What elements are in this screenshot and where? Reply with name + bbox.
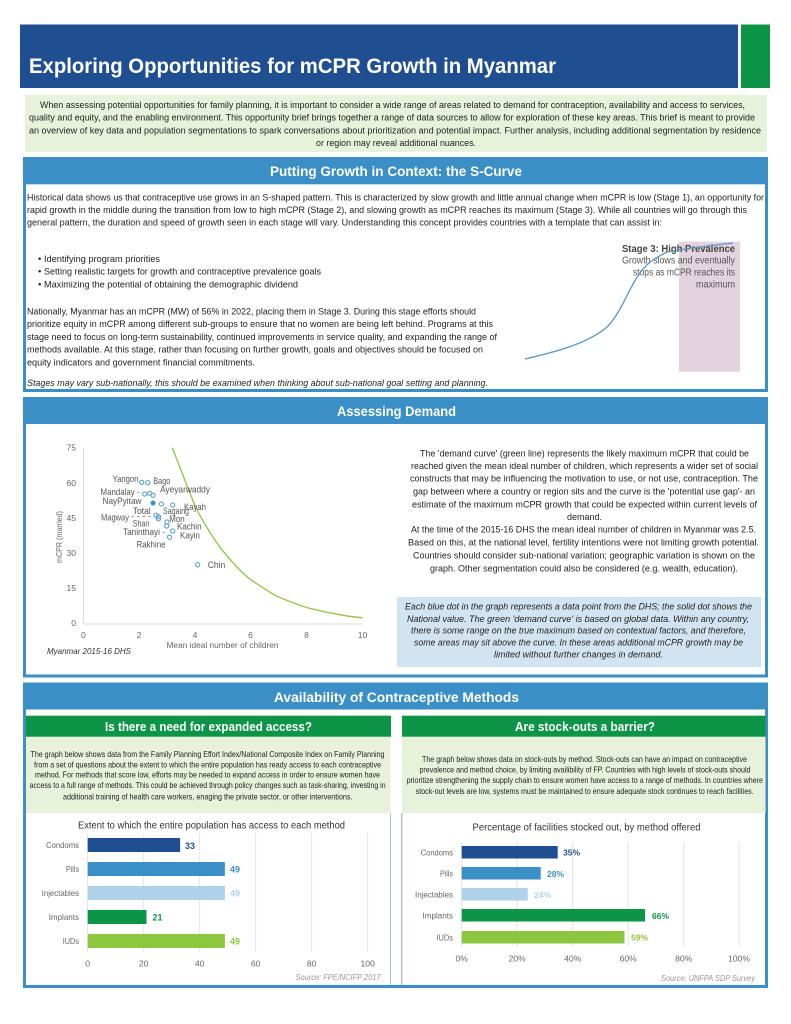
data labels: Mon <box>169 513 185 524</box>
expanded access text: access to a full range of methods. This could be achieved through policy changes such as task-sharing, investing in <box>30 781 386 790</box>
bar chart: access by method: 0 <box>85 958 90 968</box>
bullet list: • <box>38 267 41 278</box>
data labels: Ayeyarwaddy <box>160 484 210 495</box>
scatter chart: 2 <box>137 630 142 640</box>
intro text panel: an overview of key data and population segmentations to spark conversations about prioritization and potential impact. Further analysis, including additional segmentation by residence <box>29 126 761 136</box>
expanded access text: from a set of questions about the extent to which the entire population has ready access to each contraceptive <box>34 760 381 769</box>
demand curve explanation: gap between where a country or region sits and the curve is the 'potential use gap'- an <box>413 487 755 498</box>
demand curve <box>172 448 362 618</box>
expanded access text <box>30 750 386 802</box>
Myanmar stage text: prioritize equity in mCPR among different sub-groups to ensure that no women are being left behind. Programs at this <box>27 319 493 330</box>
bar chart: access by method: Condoms <box>46 840 79 850</box>
panel: assessing demand <box>23 397 768 676</box>
stage 3 label: maximum <box>696 280 735 290</box>
scatter chart: 4 <box>193 630 198 640</box>
Myanmar stage text <box>27 306 497 369</box>
bar chart: access by method: 49 <box>230 936 240 946</box>
scatter chart: 60 <box>66 478 76 488</box>
data labels: Shan <box>133 517 149 528</box>
bar chart: stock-outs by method: Implants <box>422 910 453 920</box>
scatter chart: 10 <box>358 630 367 640</box>
graph note callout: Each blue dot in the graph represents a data point from the DHS; the solid dot shows the <box>405 602 752 613</box>
bar chart: stock-outs by method: 35% <box>563 848 580 858</box>
graph note callout: limited without further changes in demand. <box>494 649 663 660</box>
data labels: Yangon <box>112 473 138 484</box>
scatter chart: Myanmar 2015-16 DHS <box>47 647 132 656</box>
bar chart: stock-outs by method: Pills <box>440 868 453 878</box>
graph note callout <box>397 597 761 667</box>
data labels: Sagaing <box>163 505 189 516</box>
demand curve explanation: Based on this, at the national level, fertility intentions were not limiting growth potential. <box>408 538 759 549</box>
bar chart: stock-outs by method: 100% <box>728 954 750 964</box>
scatter chart: 30 <box>66 548 76 558</box>
Myanmar stage text: equity indicators and government financial commitments. <box>27 358 255 369</box>
heading: assessing demand: Assessing Demand <box>337 404 456 419</box>
demand curve explanation: demand. <box>567 512 602 523</box>
stage 3 label <box>622 244 735 290</box>
bar chart: stock-outs by method: IUDs <box>436 932 453 942</box>
bar chart: stock-outs by method: 20% <box>509 954 526 964</box>
scatter chart: 0 <box>71 618 76 628</box>
expanded access text: additional training of health care workers, enaging the private sector, or other interventions. <box>63 793 352 802</box>
bar chart: access by method <box>42 820 381 982</box>
bar chart: access by method: IUDs <box>63 936 79 946</box>
panel: availability of contraceptive methods <box>23 683 768 986</box>
scatter chart <box>47 442 367 656</box>
S-curve chart <box>525 242 740 372</box>
Myanmar stage text: methods available. At this stage, rather than focusing on further growth, goals and objectives should be focused on <box>27 345 483 356</box>
data labels: Bago <box>153 475 170 486</box>
bar chart: access by method: 80 <box>307 958 317 968</box>
heading: S-curve: Putting Growth in Context: the S-Curve <box>270 164 522 179</box>
scatter chart: 6 <box>248 630 253 640</box>
bar chart: stock-outs by method: 66% <box>652 911 669 921</box>
panel: stock-outs <box>402 716 766 985</box>
demand curve explanation: constructs that may be influencing the motivation to use, or not use, contraception. The <box>410 474 758 485</box>
bar chart: stock-outs by method: Injectables <box>415 890 453 900</box>
bullet list <box>38 254 321 291</box>
bar chart: access by method: Implants <box>49 912 79 922</box>
intro text panel <box>25 95 767 152</box>
scatter chart: 75 <box>66 442 76 452</box>
title: Exploring Opportunities for mCPR Growth in Myanmar <box>29 55 556 78</box>
bar chart: stock-outs by method: 0% <box>455 954 468 964</box>
scatter chart: 8 <box>304 630 309 640</box>
data labels: - - - - <box>131 510 151 521</box>
bar chart: access by method: 21 <box>152 912 163 922</box>
expanded access text: method. For methods that score low, efforts may be needed to expand access in order to ensure women have <box>35 771 380 780</box>
source note: Source: UNFPA SDP Survey <box>661 974 756 983</box>
demand curve explanation: reached given the mean ideal number of children, which represents a wider set of social <box>411 461 758 472</box>
source note: Source: FPE/NCIFP 2017 <box>296 973 381 982</box>
data labels <box>100 473 225 570</box>
panel: expanded access <box>26 716 391 985</box>
data labels: NayPyitaw <box>102 495 142 506</box>
data labels: Chin <box>208 559 225 570</box>
demand curve explanation: estimate of the maximum mCPR growth that could be expected within current levels of <box>412 499 757 510</box>
stage 3 label: Stage 3: High Prevalence <box>622 244 735 255</box>
demand curve explanation: The 'demand curve' (green line) represents the likely maximum mCPR that could be <box>420 448 749 459</box>
graph note callout: National value. The green 'demand curve' is based on global data. Within any country, <box>407 614 749 625</box>
bullet list: • <box>38 254 41 265</box>
Myanmar stage text: stage need to focus on long-term sustainability, continued improvements in service quality, and expanding the range of <box>27 332 497 343</box>
chart title: Extent to which the entire population has access to each method <box>78 820 345 832</box>
bar chart: access by method: 60 <box>251 958 261 968</box>
chart title: Percentage of facilities stocked out, by method offered <box>472 822 700 834</box>
bar chart: access by method: 40 <box>195 958 205 968</box>
S-curve intro text: general pattern, the duration and speed of growth seen in each stage will vary. Understanding this concept provides countries with a template that can assist in: <box>27 218 662 229</box>
stage 3 label: stops as mCPR reaches its <box>633 268 735 278</box>
data labels: Total <box>133 505 151 516</box>
bar chart: access by method: Injectables <box>42 888 79 898</box>
scatter chart: 15 <box>66 583 76 593</box>
scatter chart: 45 <box>66 513 76 523</box>
bar chart: stock-outs by method: Condoms <box>421 848 453 858</box>
demand curve explanation: Countries should consider sub-national variation; geographic variation is shown on the <box>413 550 755 561</box>
heading: expanded access: Is there a need for expanded access? <box>105 720 312 734</box>
data labels: Taninthayi - <box>123 526 165 537</box>
demand curve explanation <box>408 448 759 574</box>
bullet list: • <box>38 280 41 291</box>
panel: S-curve <box>23 158 768 390</box>
S-curve intro text: rapid growth in the middle during the transition from low to high mCPR (Stage 2), and slowing growth as mCPR reaches its maximum (Stage 3). While all countries will go through this <box>27 205 747 216</box>
bar chart: access by method: 49 <box>230 888 240 898</box>
data labels: Kayin <box>180 530 200 541</box>
demand curve explanation: At the time of the 2015-16 DHS the mean ideal number of children in Myanmar was 2.5. <box>411 524 756 535</box>
bar chart: stock-outs by method: 40% <box>564 954 582 964</box>
bullet list: Setting realistic targets for growth and contraceptive prevalence goals <box>44 267 321 278</box>
data labels: Rakhine <box>136 538 166 549</box>
bar chart: stock-outs by method: 80% <box>675 954 693 964</box>
stage 3 label: Growth slows and eventually <box>622 256 735 266</box>
heading: availability: Availability of Contraceptive Methods <box>274 690 519 705</box>
scatter chart: mCPR (married) <box>54 511 64 563</box>
graph note callout: some areas may sit above the curve. In these areas additional mCPR growth may be <box>414 637 743 648</box>
bar chart: stock-outs by method: 59% <box>631 932 648 942</box>
bar chart: stock-outs by method <box>415 822 756 983</box>
data labels: Magway <box>101 512 129 523</box>
data points <box>140 480 200 567</box>
data labels: Kayah <box>184 501 206 512</box>
bullet list: Maximizing the potential of obtaining the demographic dividend <box>44 280 298 291</box>
scatter chart: Mean ideal number of children <box>166 640 279 650</box>
Myanmar stage text: Nationally, Myanmar has an mCPR (MW) of 56% in 2022, placing them in Stage 3. During this stage efforts should <box>27 306 476 317</box>
bar chart: stock-outs by method: 24% <box>534 890 551 900</box>
bar chart: access by method: 20 <box>139 958 149 968</box>
bar chart: stock-outs by method: 60% <box>620 954 637 964</box>
stock-outs text: The graph below shows data on stock-outs by method. Stock-outs can have an impact on contraceptive <box>422 755 747 764</box>
bar chart: access by method: 49 <box>230 864 240 874</box>
bar chart: access by method: Pills <box>66 864 79 874</box>
S-curve intro text <box>27 192 765 229</box>
bullet list: Identifying program priorities <box>44 254 160 265</box>
bar chart: access by method: 33 <box>185 841 195 851</box>
data labels: Mandalay - <box>100 486 140 497</box>
intro text panel: When assessing potential opportunities for family planning, it is important to consider a wide range of areas related to demand for contraception, availability and access to services, <box>40 100 745 111</box>
graph note callout: there is some range on the true maximum based on contextual factors, and therefore, <box>411 625 746 636</box>
bar chart: stock-outs by method: 28% <box>547 869 564 879</box>
italic note: Stages may vary sub-nationally, this should be examined when thinking about sub-national goal setting and planning. <box>27 378 488 389</box>
title banner <box>20 24 770 88</box>
intro text panel: quality and equity, and the enabling environment. This opportunity brief brings together a range of data sources to allow for exploration of these key areas. This brief is meant to provide <box>29 112 755 124</box>
data labels: Kachin <box>177 521 202 532</box>
scatter chart: 0 <box>81 630 86 640</box>
expanded access text: The graph below shows data from the Family Planning Effort Index/National Composite Index on Family Planning <box>30 750 385 759</box>
heading: stock-outs: Are stock-outs a barrier? <box>515 720 655 734</box>
intro text panel: or region may reveal additional nuances. <box>316 138 476 149</box>
demand curve explanation: graph. Other segmentation could also be considered (e.g. wealth, education). <box>430 563 738 574</box>
stock-outs text <box>407 755 763 796</box>
bar chart: access by method: 100 <box>361 958 375 968</box>
